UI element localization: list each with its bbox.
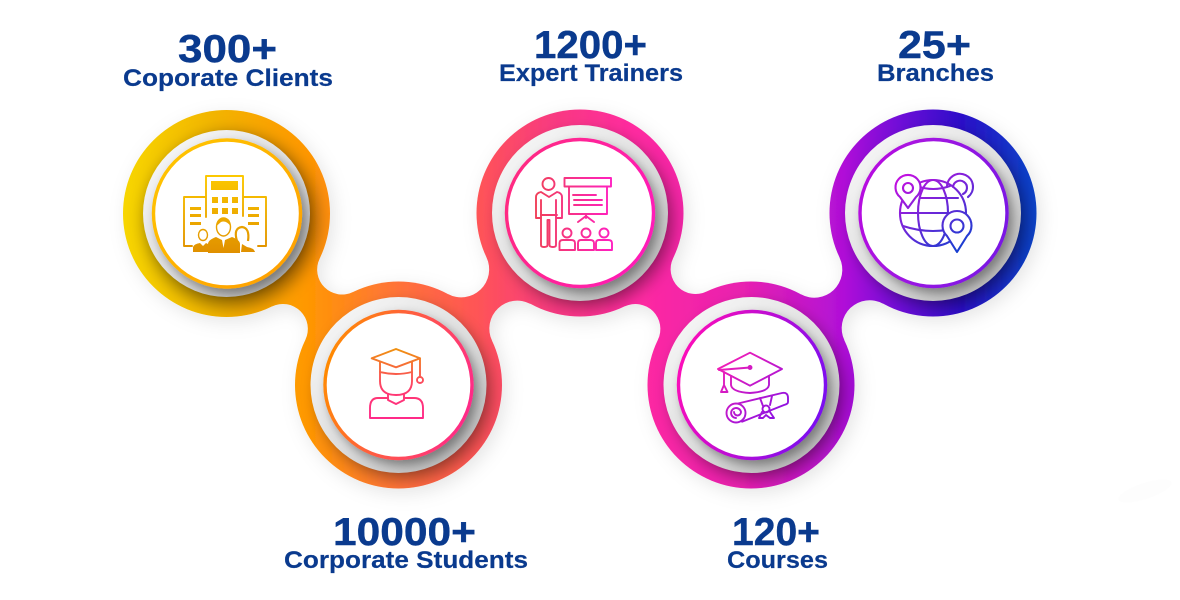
gradient chain of five connected circles: [123, 110, 1036, 488]
white disc: [154, 140, 300, 287]
node: corporate clients: [143, 130, 310, 297]
icon: student with mortarboard: [370, 349, 423, 418]
stat: 25+ Branches: [877, 24, 994, 87]
cast shadows on the chain: [145, 134, 1025, 478]
stat: 25+ Branches: 25+: [898, 24, 971, 67]
stat: 300+ Coporate Clients: Coporate Clients: [123, 65, 333, 92]
stat: 10000+ Corporate Students: 10000+: [333, 511, 476, 554]
grey ring: [143, 130, 310, 297]
stat: 300+ Coporate Clients: 300+: [178, 28, 277, 71]
grey ring: [664, 297, 840, 473]
white disc: [506, 140, 654, 286]
stat: 1200+ Expert Trainers: Expert Trainers: [499, 60, 683, 87]
icon: graduation cap and diploma scroll: [718, 353, 788, 422]
grey ring: [845, 125, 1021, 301]
stat: 120+ Courses: Courses: [727, 547, 828, 574]
icon: office buildings and people: [184, 176, 266, 253]
faint smudge: [1116, 475, 1174, 507]
stat: 120+ Courses: 120+: [732, 511, 820, 554]
icon: globe with location pins: [896, 174, 973, 252]
white disc: [325, 312, 472, 458]
white disc: [678, 312, 826, 458]
node: expert trainers: [492, 125, 668, 301]
grey ring: [492, 125, 668, 301]
stat: 25+ Branches: Branches: [877, 60, 994, 87]
icon: trainer with presentation board: [536, 178, 612, 250]
node: courses: [664, 297, 840, 473]
stat: 10000+ Corporate Students: Corporate Students: [284, 547, 528, 574]
node: branches: [845, 125, 1021, 301]
grey ring: [310, 297, 486, 473]
stat: 10000+ Corporate Students: [284, 511, 528, 574]
node: corporate students: [310, 297, 486, 473]
stat: 120+ Courses: [727, 511, 828, 574]
stat: 1200+ Expert Trainers: [499, 24, 683, 87]
white disc: [860, 140, 1007, 286]
stat: 300+ Coporate Clients: [123, 28, 333, 92]
stat: 1200+ Expert Trainers: 1200+: [534, 24, 647, 67]
